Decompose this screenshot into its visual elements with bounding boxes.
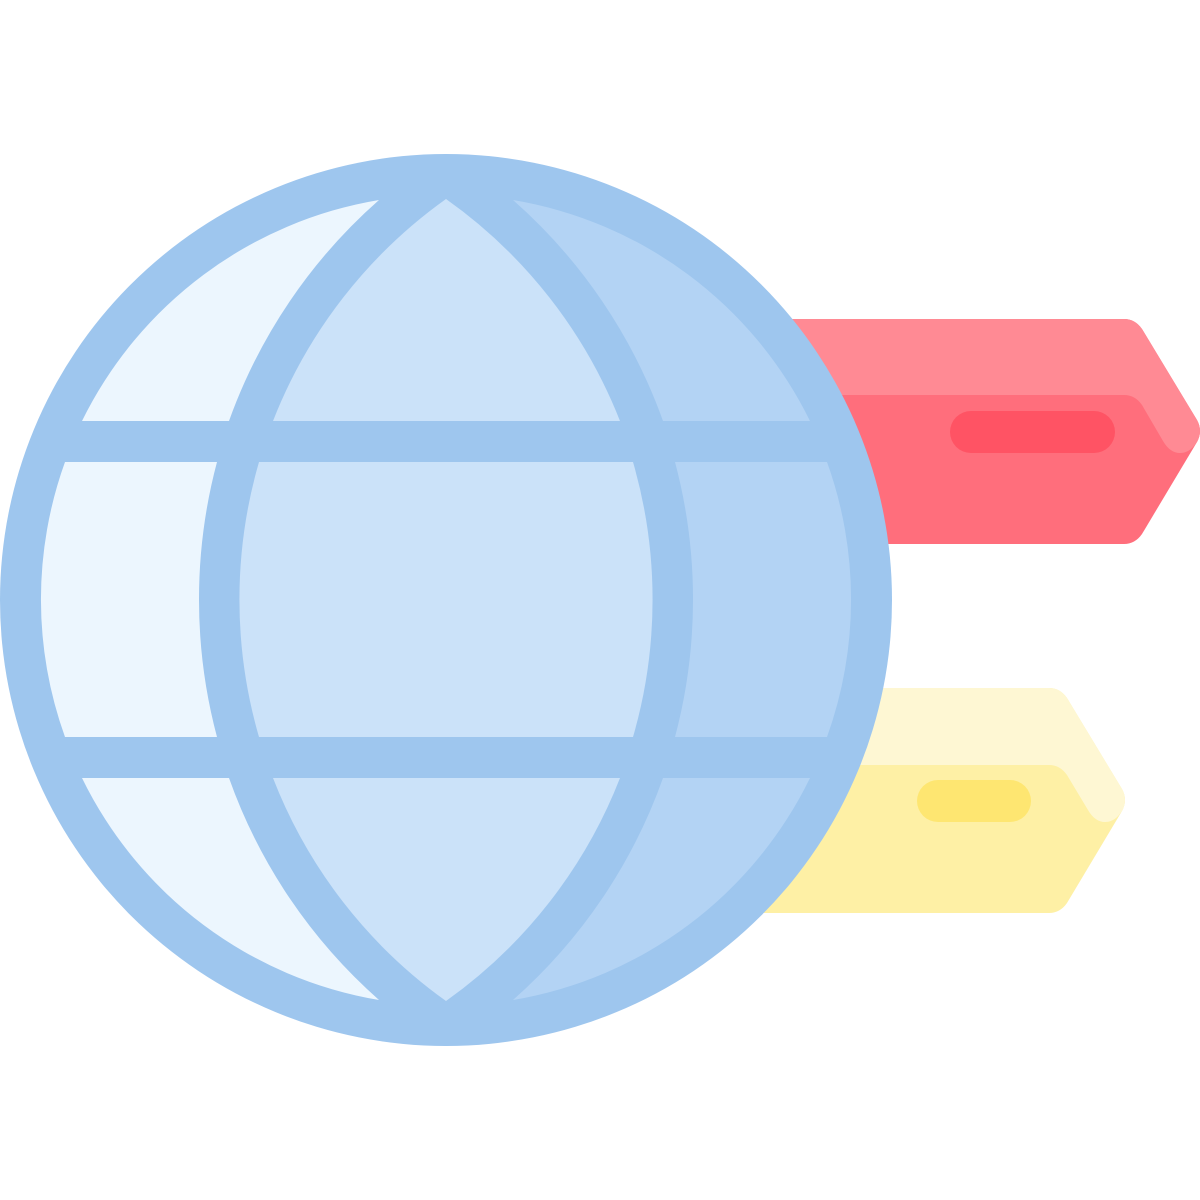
panel: bottom left (82, 778, 379, 1000)
panel: top left (82, 200, 379, 421)
panel: middle left (41, 462, 217, 737)
panel: top right (513, 200, 810, 421)
red arrow sign (700, 319, 1200, 544)
panel: middle centre (239, 462, 653, 737)
yellow arrow sign (700, 688, 1125, 913)
panel: middle right (675, 462, 851, 737)
globe base outline (0, 154, 892, 1046)
globe (0, 154, 892, 1046)
panel: bottom centre (273, 778, 620, 1001)
panel: bottom right (513, 778, 810, 1000)
panel: top centre (273, 199, 620, 421)
